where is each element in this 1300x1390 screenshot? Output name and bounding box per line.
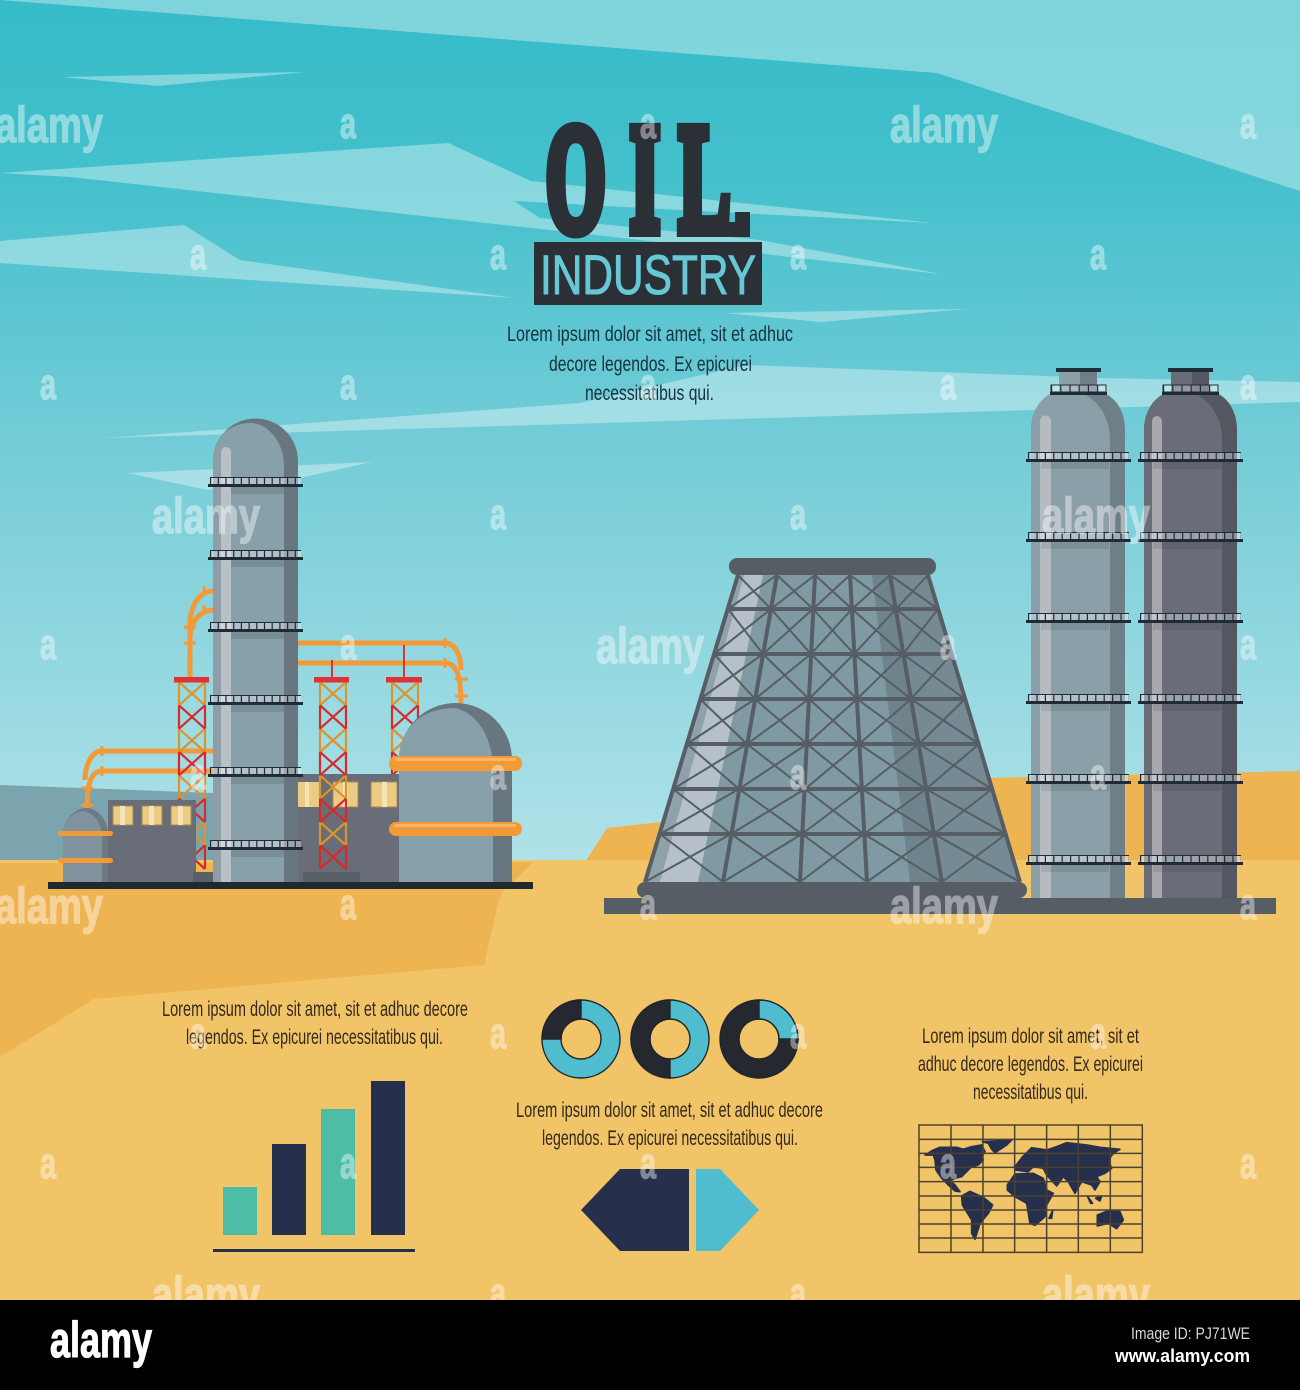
footer image id: Image ID: PJ71WE (1131, 1324, 1250, 1343)
plant base slab (604, 898, 1276, 914)
distillation tower (208, 419, 303, 885)
world map with grid (919, 1125, 1142, 1252)
background: clouds (0, 0, 1300, 490)
refinery base slab (48, 882, 533, 889)
alamy watermarks: a (790, 230, 806, 279)
text block: centre: legendos. Ex epicurei necessitatibus qui. (542, 1127, 798, 1150)
storage tank: large dome (389, 703, 522, 882)
alamy watermarks: a (1090, 230, 1106, 279)
alamy watermarks: a (790, 1009, 806, 1058)
split arrow diagram (581, 1169, 759, 1251)
alamy watermarks: a (640, 1139, 656, 1188)
title: OIL: OIL (546, 95, 730, 264)
tower bottom rim (637, 882, 1027, 898)
storage tank: small dome (58, 808, 113, 882)
alamy watermarks: a (790, 1269, 806, 1318)
alamy watermarks: a (940, 620, 956, 669)
alamy watermarks: a (490, 1009, 506, 1058)
alamy watermarks: a (190, 750, 206, 799)
title: INDUSTRY banner: INDUSTRY (540, 243, 756, 306)
alamy watermarks: a (40, 620, 56, 669)
alamy watermarks: alamy (890, 878, 998, 934)
text block: right (918, 1025, 1143, 1104)
alamy watermarks: a (490, 230, 506, 279)
donut 3: one quarter (720, 1000, 798, 1078)
footer logo: alamy (50, 1312, 152, 1368)
alamy watermarks: alamy (152, 1267, 260, 1323)
alamy watermarks: a (40, 360, 56, 409)
text block: left (162, 998, 468, 1049)
tank A (1026, 368, 1131, 899)
alamy watermarks: alamy (1042, 1267, 1150, 1323)
intro text: decore legendos. Ex epicurei (549, 353, 752, 376)
alamy watermarks: a (790, 750, 806, 799)
intro text: Lorem ipsum dolor sit amet, sit et adhuc (507, 323, 793, 346)
alamy watermarks: a (1240, 620, 1256, 669)
tower lattice: cross braces (645, 575, 1020, 882)
alamy watermarks: a (1240, 360, 1256, 409)
building: left block (108, 800, 213, 882)
lattice tower 1 (174, 677, 209, 869)
alamy watermarks: a (340, 880, 356, 929)
alamy watermarks: a (340, 360, 356, 409)
footer bar (0, 1300, 1300, 1390)
alamy watermarks: a (340, 99, 356, 148)
donut 1: three quarters (542, 1000, 620, 1078)
cooling tower (637, 558, 1027, 898)
red pipe supports (332, 645, 404, 677)
footer url: www.alamy.com (1114, 1346, 1250, 1366)
alamy watermarks: a (940, 360, 956, 409)
orange pipes: upper left (184, 586, 213, 680)
twin storage tanks (1026, 368, 1243, 899)
alamy watermarks: a (1240, 880, 1256, 929)
alamy watermarks: a (790, 490, 806, 539)
intro text: necessitatibus qui. (585, 382, 714, 405)
orange pipes: lower left (81, 746, 213, 808)
alamy watermarks: a (490, 750, 506, 799)
alamy watermarks: a (1240, 1139, 1256, 1188)
tower body shading (645, 575, 1020, 882)
text block: left: legendos. Ex epicurei necessitatibus qui. (186, 1026, 443, 1049)
text block: right: necessitatibus qui. (973, 1081, 1088, 1104)
continents (925, 1140, 1123, 1239)
map grid (919, 1125, 1142, 1252)
alamy watermarks: a (340, 1139, 356, 1188)
tank B (1138, 368, 1243, 899)
alamy watermarks: a (490, 1269, 506, 1318)
donut 2: half (631, 1000, 709, 1078)
text block: left: Lorem ipsum dolor sit amet, sit et adhuc decore (162, 998, 468, 1021)
text block: right: Lorem ipsum dolor sit amet, sit et (922, 1025, 1139, 1048)
text block: centre: Lorem ipsum dolor sit amet, sit et adhuc decore (516, 1099, 823, 1122)
left refinery complex (48, 419, 533, 889)
orange pipes: upper right (298, 638, 468, 703)
alamy watermarks: a (640, 360, 656, 409)
tower lattice: frame (645, 575, 1020, 882)
alamy watermarks: alamy (1042, 488, 1150, 544)
text block: right: adhuc decore legendos. Ex epicurei (918, 1053, 1143, 1076)
intro text (507, 323, 793, 405)
alamy watermarks: a (1090, 750, 1106, 799)
background: desert ground (0, 771, 1300, 1300)
alamy watermarks: a (640, 99, 656, 148)
alamy watermarks: a (340, 620, 356, 669)
alamy watermarks: a (190, 1009, 206, 1058)
bar chart (213, 1081, 415, 1252)
alamy watermarks: a (1090, 1009, 1106, 1058)
alamy watermarks: alamy (890, 97, 998, 153)
lattice tower 3 (386, 677, 422, 869)
text block: centre (516, 1099, 823, 1150)
building: right block (298, 774, 400, 882)
alamy watermarks: a (490, 490, 506, 539)
alamy watermarks: a (640, 880, 656, 929)
alamy watermarks: a (190, 230, 206, 279)
alamy watermarks: a (940, 1139, 956, 1188)
background: sky (0, 0, 1300, 870)
alamy watermarks: alamy (596, 618, 704, 674)
background: distant grey hill (0, 785, 213, 870)
alamy watermarks: a (1240, 99, 1256, 148)
lattice tower 2 (303, 677, 360, 882)
alamy watermarks: a (40, 1139, 56, 1188)
donut charts (542, 1000, 798, 1078)
tower top rim (729, 558, 936, 575)
alamy watermarks: alamy (152, 488, 260, 544)
